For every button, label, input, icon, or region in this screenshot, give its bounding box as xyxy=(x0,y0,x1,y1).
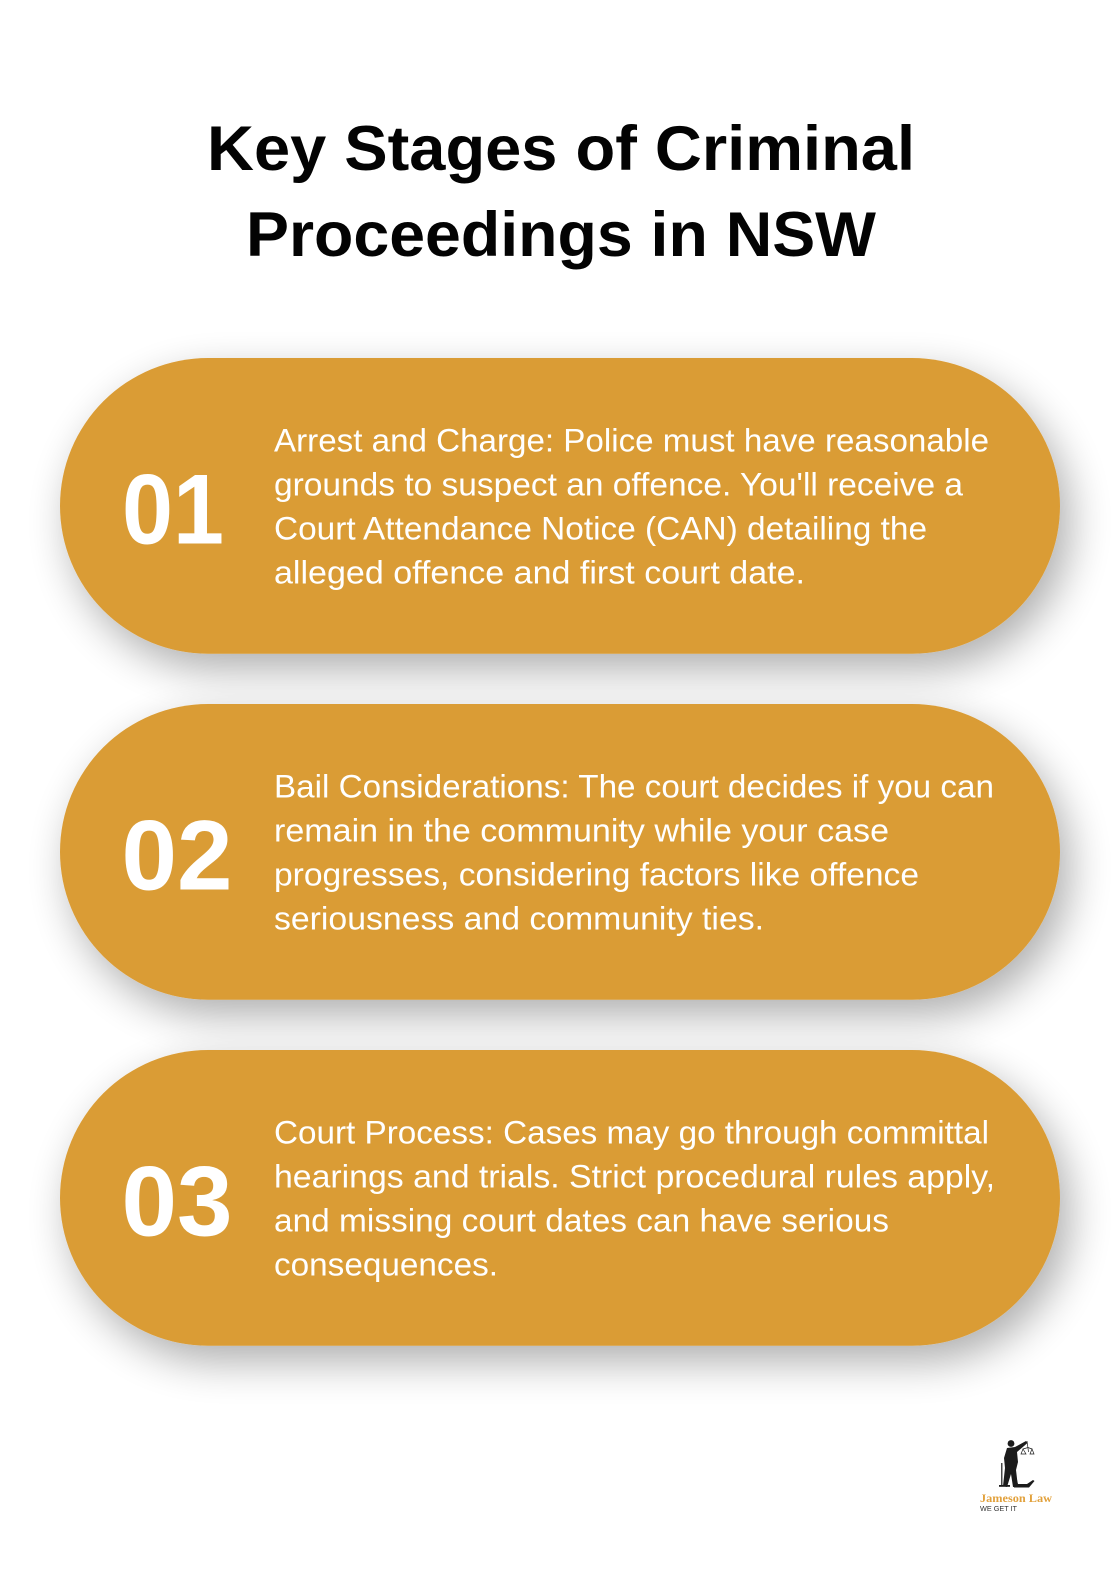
number 02: 02 xyxy=(122,800,232,910)
text: arrest and charge: grounds to suspect an offence. You'll receive a xyxy=(274,466,963,502)
text: court process: hearings and trials. Strict procedural rules apply, xyxy=(274,1158,995,1194)
text: bail considerations: progresses, considering factors like offence xyxy=(274,856,919,892)
icon: lady justice xyxy=(999,1440,1034,1488)
text: bail considerations: remain in the community while your case xyxy=(274,812,889,848)
text: arrest and charge: Court Attendance Notice (CAN) detailing the xyxy=(274,510,927,546)
pill background 01 xyxy=(60,358,1060,654)
logo: Jameson Law xyxy=(980,1440,1053,1513)
text: court process: and missing court dates can have serious xyxy=(274,1202,889,1238)
text: arrest and charge: Arrest and Charge: Police must have reasonable xyxy=(274,423,989,459)
panel: stage 03 court process xyxy=(60,1050,1060,1346)
pill background 03 xyxy=(60,1050,1060,1346)
text: court process: consequences. xyxy=(274,1246,498,1282)
text: court process xyxy=(274,1115,995,1282)
logo wordmark: Jameson Law xyxy=(980,1493,1053,1505)
text: bail considerations: seriousness and community ties. xyxy=(274,900,764,936)
pill background 02 xyxy=(60,704,1060,1000)
number 01: 01 xyxy=(122,454,224,564)
title xyxy=(207,114,915,270)
logo tagline: WE GET IT xyxy=(980,1506,1018,1513)
title: Proceedings in NSW xyxy=(246,200,877,270)
text: bail considerations: Bail Considerations: The court decides if you can xyxy=(274,769,994,805)
text: court process: Court Process: Cases may go through committal xyxy=(274,1115,989,1151)
number 03: 03 xyxy=(122,1146,232,1256)
title: Key Stages of Criminal xyxy=(207,114,915,184)
text: arrest and charge: alleged offence and first court date. xyxy=(274,554,805,590)
text: bail considerations xyxy=(274,769,994,936)
panel: stage 02 bail considerations xyxy=(60,704,1060,1000)
text: arrest and charge xyxy=(274,423,989,590)
panel: stage 01 arrest and charge xyxy=(60,358,1060,654)
